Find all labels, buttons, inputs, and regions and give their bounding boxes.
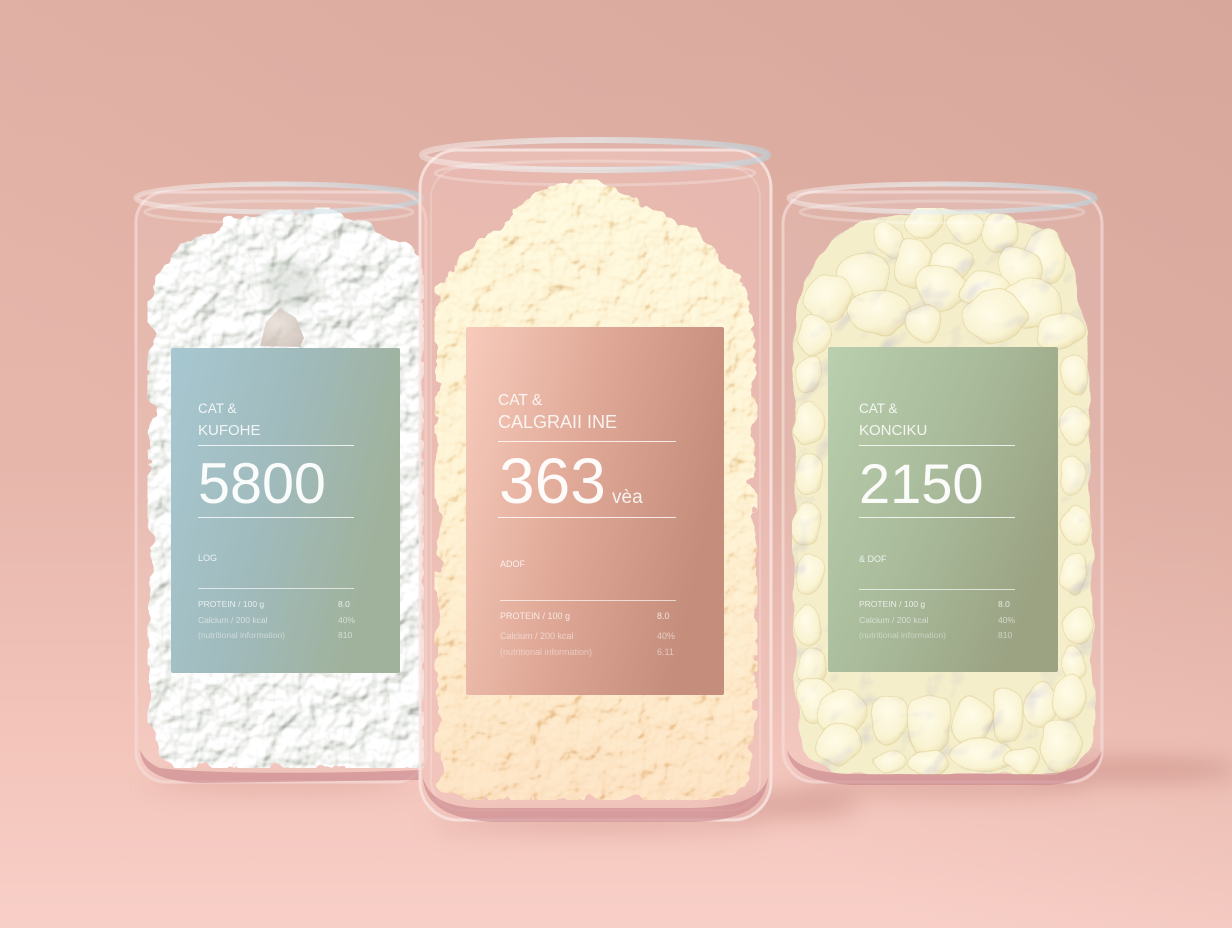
label left: LOG: [198, 553, 217, 563]
label left: 8.0: [338, 599, 350, 609]
label centre: vèa: [612, 487, 643, 508]
rim left: [136, 184, 422, 212]
label left: KUFOHE: [198, 422, 261, 439]
label right: 40%: [998, 615, 1015, 625]
label left: 5800: [198, 452, 326, 516]
jar: centre: [420, 140, 771, 822]
shaded gap left: [264, 259, 316, 311]
label left: PROTEIN / 100 g: [198, 599, 264, 609]
lumps bottom right: [797, 676, 1086, 774]
rim centre: [422, 140, 768, 170]
label centre: Calcium / 200 kcal: [500, 631, 574, 641]
floor shadows: [145, 759, 1232, 830]
label right: [828, 347, 1058, 672]
contents left: [148, 208, 424, 768]
jar: left: [136, 184, 426, 783]
label centre: PROTEIN / 100 g: [500, 611, 570, 621]
label left: 40%: [338, 615, 355, 625]
label centre: ADOF: [500, 559, 526, 569]
label left: [171, 348, 400, 673]
jar body left: [136, 192, 426, 782]
label centre: [466, 327, 724, 695]
lumps top right: [799, 208, 1082, 355]
contents right: [792, 208, 1096, 775]
label right: & DOF: [859, 554, 887, 564]
label left: Calcium / 200 kcal: [198, 615, 268, 625]
label right: CAT &: [859, 401, 898, 416]
label right: KONCIKU: [859, 422, 927, 439]
label right: PROTEIN / 100 g: [859, 599, 925, 609]
base left: [140, 750, 420, 783]
base right: [787, 750, 1102, 785]
label left: 810: [338, 630, 352, 640]
label centre: CALGRAII INE: [498, 412, 617, 432]
lumps sides right: [793, 355, 1091, 683]
label centre: CAT &: [498, 392, 543, 409]
label right: 8.0: [998, 599, 1010, 609]
jar: right: [783, 184, 1102, 785]
base centre: [423, 778, 768, 822]
label right: Calcium / 200 kcal: [859, 615, 929, 625]
label right: (nutritional information): [859, 630, 946, 640]
jar body centre: [420, 150, 771, 820]
label right: 810: [998, 630, 1012, 640]
label left: (nutritional information): [198, 630, 285, 640]
label centre: (nutritional information): [500, 647, 592, 657]
label centre: 6.11: [657, 647, 674, 657]
label centre: 363: [499, 445, 606, 517]
label centre: 8.0: [657, 611, 670, 621]
label centre: 40%: [657, 631, 675, 641]
rock left: [260, 308, 304, 347]
inner wall centre: [431, 168, 760, 810]
contents centre: [435, 180, 757, 800]
rim right: [789, 184, 1095, 212]
label left: CAT &: [198, 401, 237, 416]
label right: 2150: [859, 452, 984, 515]
jar body right: [783, 192, 1102, 782]
